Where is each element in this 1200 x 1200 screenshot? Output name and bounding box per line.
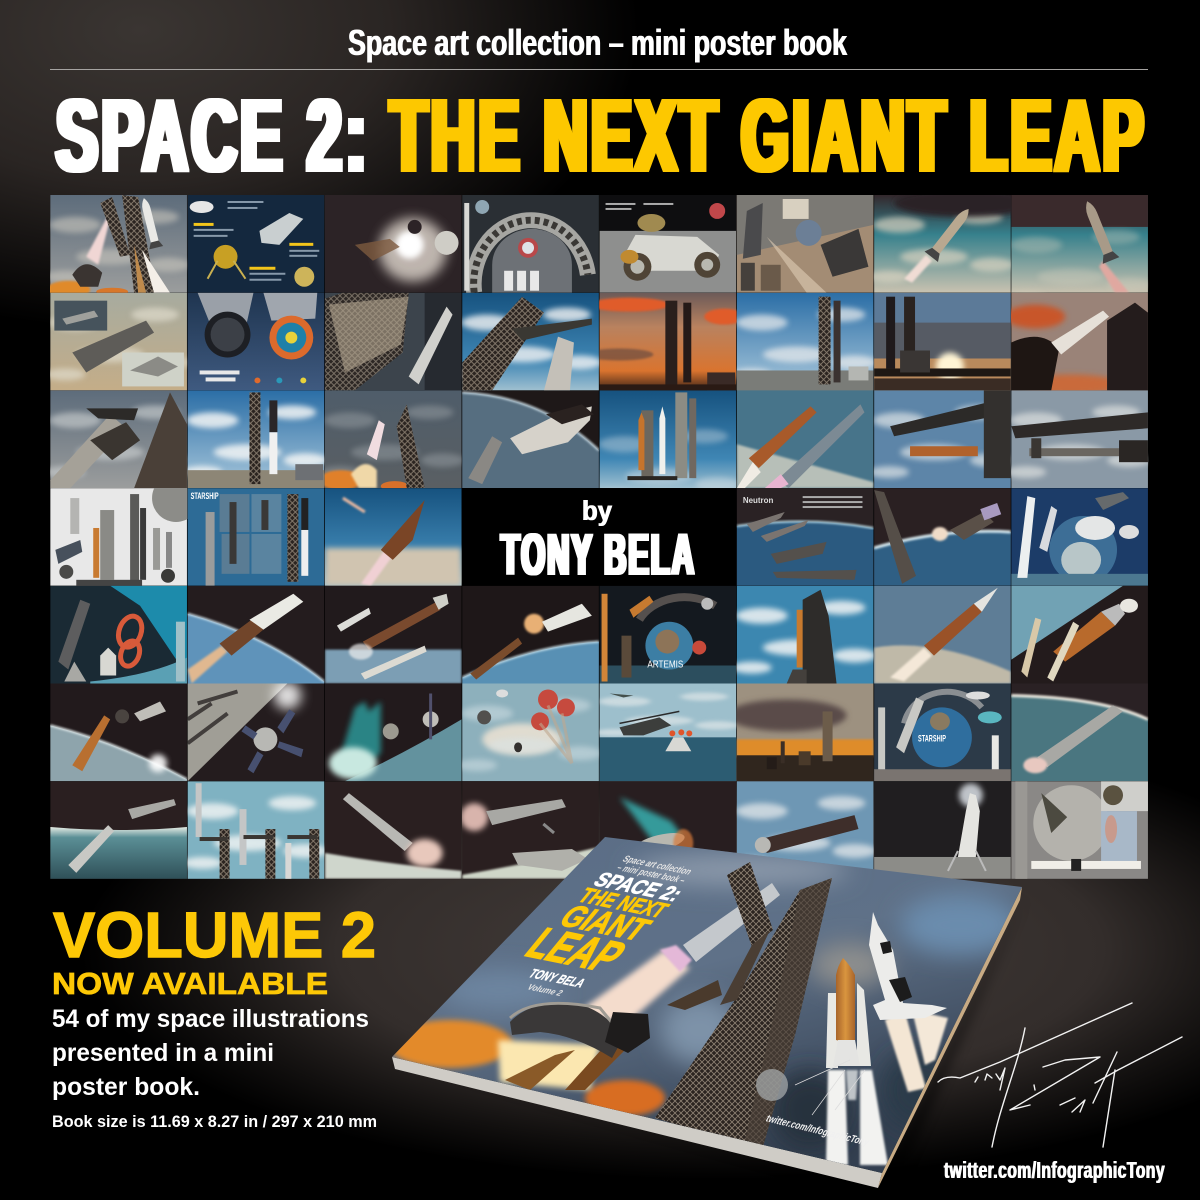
thumbnail r7c3: booster burn [325,781,462,879]
callout: volume 2 availability: VOLUME 2 [53,899,376,971]
thumbnail grid [45,189,1151,879]
thumbnail r7c8: Apollo 11 composite [1011,781,1148,879]
thumbnail r2c2: Raptor engines [188,292,324,390]
thumbnail r1c5: lunar rover [600,195,736,293]
thumbnail r1c7: Starship over clouds [874,195,1012,293]
thumbnail r3c2: Starship on pad [187,390,325,488]
thumbnail r3c3: launch with fire [324,390,462,488]
panel: author credit: by [582,495,612,526]
thumbnail r3c6: rockets ascending [736,390,874,488]
callout: volume 2 availability: presented in a mini [52,1039,274,1067]
thumbnail r2c8: launch mount silhouette [1011,292,1148,390]
thumbnail r6c5: recovery helicopter [595,684,739,781]
signature [938,1003,1182,1147]
book cover title: LEAP [515,920,636,982]
thumbnail r1c8: Starship ascending [1011,195,1148,293]
thumbnail r6c3: re-entry [325,684,462,781]
thumbnail r2c3: tower detail [324,292,462,390]
book cover title: THE NEXT [573,884,674,922]
thumbnail r5c8: SLS separation [1011,586,1148,684]
thumbnail r2c5: sunset silhouette [599,292,736,390]
thumbnail r3c7: SLS tower in clouds [874,390,1012,488]
thumbnail r2c1: Starship in clouds with insets [50,292,188,390]
thumbnail r4c6: Neutron: Neutron [743,496,774,505]
book cover title [497,850,701,1005]
thumbnail r6c8: Starship over earth [1011,684,1148,781]
thumbnail r1c4: Apollo arch composite [462,195,599,293]
thumbnail r4c6: Neutron [736,488,874,586]
thumbnail r5c6: SLS on pad [736,586,874,684]
title [56,78,1147,193]
thumbnail r5c3: booster separation [324,586,462,684]
callout: volume 2 availability [52,899,377,1131]
thumbnail r2c7: tower at sunrise [874,292,1011,390]
book cover title: Space art collection [620,854,694,877]
thumbnail r7c6: dark Starship in sky [732,781,876,879]
heading: subtitle: Space art collection – mini poster book [348,22,848,63]
thumbnail r4c2: Starship how it stacks up [188,488,324,586]
thumbnail r4c3: rocket above clouds [324,488,462,586]
thumbnail r2c6: tower at dawn [736,292,874,390]
thumbnail r4c1: rocket comparison [50,488,188,586]
book mockup [388,837,1025,1195]
thumbnail r7c4: in-orbit refuelling [460,781,599,879]
thumbnail r6c4: Orion parachutes [457,684,602,781]
thumbnail r5c7: SLS ascending [874,586,1012,684]
thumbnail r4c7: Neutron stage separation [874,488,1012,586]
panel: author credit: TONY BELA [501,522,696,588]
book cover title: – mini poster book – [614,863,688,886]
thumbnail r6c2: Orion over moon [187,684,324,782]
thumbnail r5c2: Atlas over earth [187,586,324,684]
thumbnail r5c5: Artemis composite: ARTEMIS [647,660,684,671]
thumbnail r7c7: Starship on moon [874,781,1011,879]
thumbnail r6c7: Starship composite: STARSHIP [918,733,946,743]
thumbnail r3c1: booster catch [50,390,188,488]
thumbnail r5c5: Artemis composite [600,586,736,684]
callout: volume 2 availability: Book size is 11.69 x 8.27 in / 297 x 210 mm [52,1113,377,1131]
thumbnail r6c1: SLS core stage and Orion [50,684,188,782]
book cover title: Volume 2 [525,983,565,998]
thumbnail r1c6: Mars 2020 [736,195,874,293]
thumbnail r3c8: tower gantry [1011,390,1148,488]
thumbnail r6c7: Starship composite [874,684,1011,781]
thumbnail r7c2: three towers [183,781,327,879]
book cover title: TONY BELA [525,967,589,991]
callout: volume 2 availability: NOW AVAILABLE [52,966,328,1001]
thumbnail r2c4: tower blue sky [462,292,600,390]
book cover twitter handle: twitter.com/InfographicTony [763,1113,872,1148]
thumbnail r5c1: Starliner [50,586,187,684]
callout: volume 2 availability: poster book. [52,1073,200,1101]
thumbnail r3c4: spacecraft over earth [462,390,600,488]
callout: volume 2 availability: 54 of my space illustrations [52,1005,369,1033]
book cover title: GIANT [552,899,659,947]
thumbnail r6c6: sunset launch site [727,684,873,781]
panel: author credit [462,488,736,588]
thumbnail r7c5: re-entry plasma [600,781,736,879]
book cover title: SPACE 2: [588,869,688,906]
thumbnail r4c8: Crew Dragon [1011,488,1148,586]
thumbnail r7c1: Super Heavy over earth [50,781,187,879]
thumbnail r5c4: capsule separation [462,586,600,684]
thumbnail r1c2: Apollo module infographic [188,195,324,292]
thumbnail r1c3: spacecraft and moon [325,195,462,292]
title: SPACE 2: [56,78,370,193]
thumbnail r1c1: launch tower [50,195,188,293]
thumbnail r4c2: Starship how it stacks up: STARSHIP [191,491,219,501]
thumbnail r3c5: rockets on pad [599,390,736,488]
